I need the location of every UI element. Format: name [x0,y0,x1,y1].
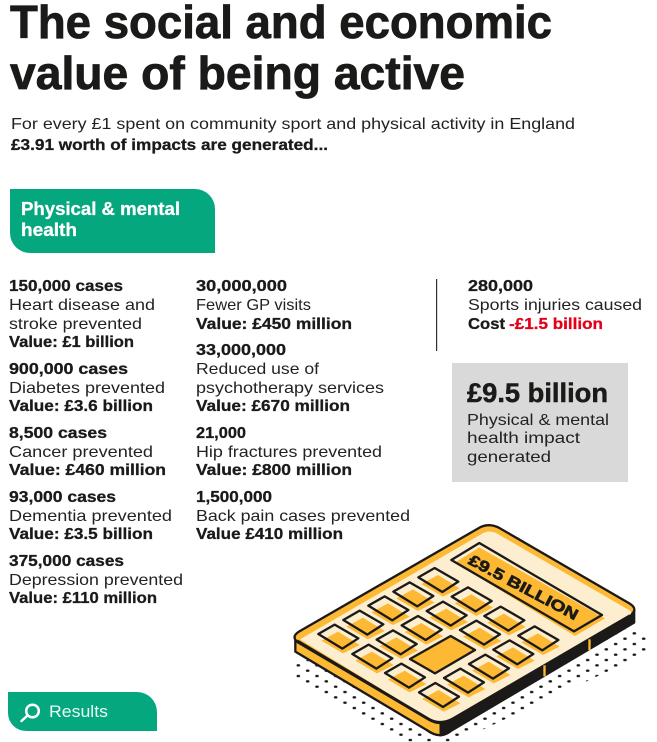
subtitle text [11,116,575,154]
calculator face [300,531,631,722]
column 2: services and injuries [196,278,410,543]
back pain stat: Back pain cases prevented [196,508,410,525]
back pain stat [196,489,410,543]
section tab: physical and mental health: health [21,220,77,240]
psychotherapy stat: psychotherapy services [196,380,384,397]
title: value of being active [10,47,465,99]
depression stat: Depression prevented [9,572,183,589]
results tab [8,692,157,731]
subtitle text: £3.91 worth of impacts are generated... [11,137,328,154]
diabetes stat: 900,000 cases [9,361,128,378]
results tab: Results [49,703,108,721]
sports injuries stat: -£1.5 billion [509,316,603,333]
calculator front side [295,638,441,735]
dotted shadow [293,628,650,742]
psychotherapy stat [196,342,384,415]
psychotherapy stat: Reduced use of [196,361,320,378]
psychotherapy stat: Value: £670 million [196,398,350,415]
back pain stat: 1,500,000 [196,489,272,506]
calculator top [295,525,634,723]
psychotherapy stat: 33,000,000 [196,342,286,359]
heart disease stat: Heart disease and [9,297,155,314]
impact total box [452,363,628,482]
dementia stat: Value: £3.5 billion [9,526,153,543]
title [10,0,552,99]
section tab: physical and mental health [10,189,215,253]
calculator illustration [293,525,650,742]
depression stat [9,553,183,607]
cancer stat: Cancer prevented [9,444,153,461]
GP visits stat: 30,000,000 [196,278,287,295]
subtitle text: For every £1 spent on community sport and physical activity in England [11,116,575,133]
heart disease stat: Value: £1 billion [9,334,134,351]
impact total box: health impact [467,430,581,447]
calculator right side [441,610,634,735]
GP visits stat: Value: £450 million [196,316,352,333]
impact total box: Physical & mental [467,412,609,429]
dementia stat: 93,000 cases [9,489,116,506]
cancer stat [9,425,166,479]
display: £9.5 BILLION [465,552,581,624]
heart disease stat: stroke prevented [9,316,142,333]
sports injuries stat: 280,000 [468,278,533,295]
GP visits stat [196,278,352,333]
depression stat: 375,000 cases [9,553,124,570]
diabetes stat [9,361,165,415]
cancer stat: 8,500 cases [9,425,107,442]
icon: magnifying glass [22,705,39,721]
diabetes stat: Value: £3.6 billion [9,398,153,415]
impact total box: generated [467,449,551,466]
heart disease stat: 150,000 cases [9,278,123,295]
hip fractures stat: Hip fractures prevented [196,444,382,461]
sports injuries stat: Sports injuries caused [468,297,642,314]
back pain stat: Value £410 million [196,526,343,543]
section tab: physical and mental health: Physical & mental [21,199,180,219]
GP visits stat: Fewer GP visits [196,297,311,314]
dementia stat [9,489,172,543]
diabetes stat: Diabetes prevented [9,380,165,397]
impact total box: £9.5 billion [467,378,608,408]
heart disease stat [9,278,155,351]
sports injuries stat: Cost [468,316,506,333]
cancer stat: Value: £460 million [9,462,166,479]
display [451,543,605,636]
hip fractures stat: 21,000 [196,425,246,442]
dementia stat: Dementia prevented [9,508,172,525]
depression stat: Value: £110 million [9,590,157,607]
keypad [318,568,560,712]
column 1: prevented conditions [9,278,183,607]
hip fractures stat [196,425,382,479]
hip fractures stat: Value: £800 million [196,462,352,479]
side notches [543,639,591,676]
sports injuries stat [468,278,642,333]
